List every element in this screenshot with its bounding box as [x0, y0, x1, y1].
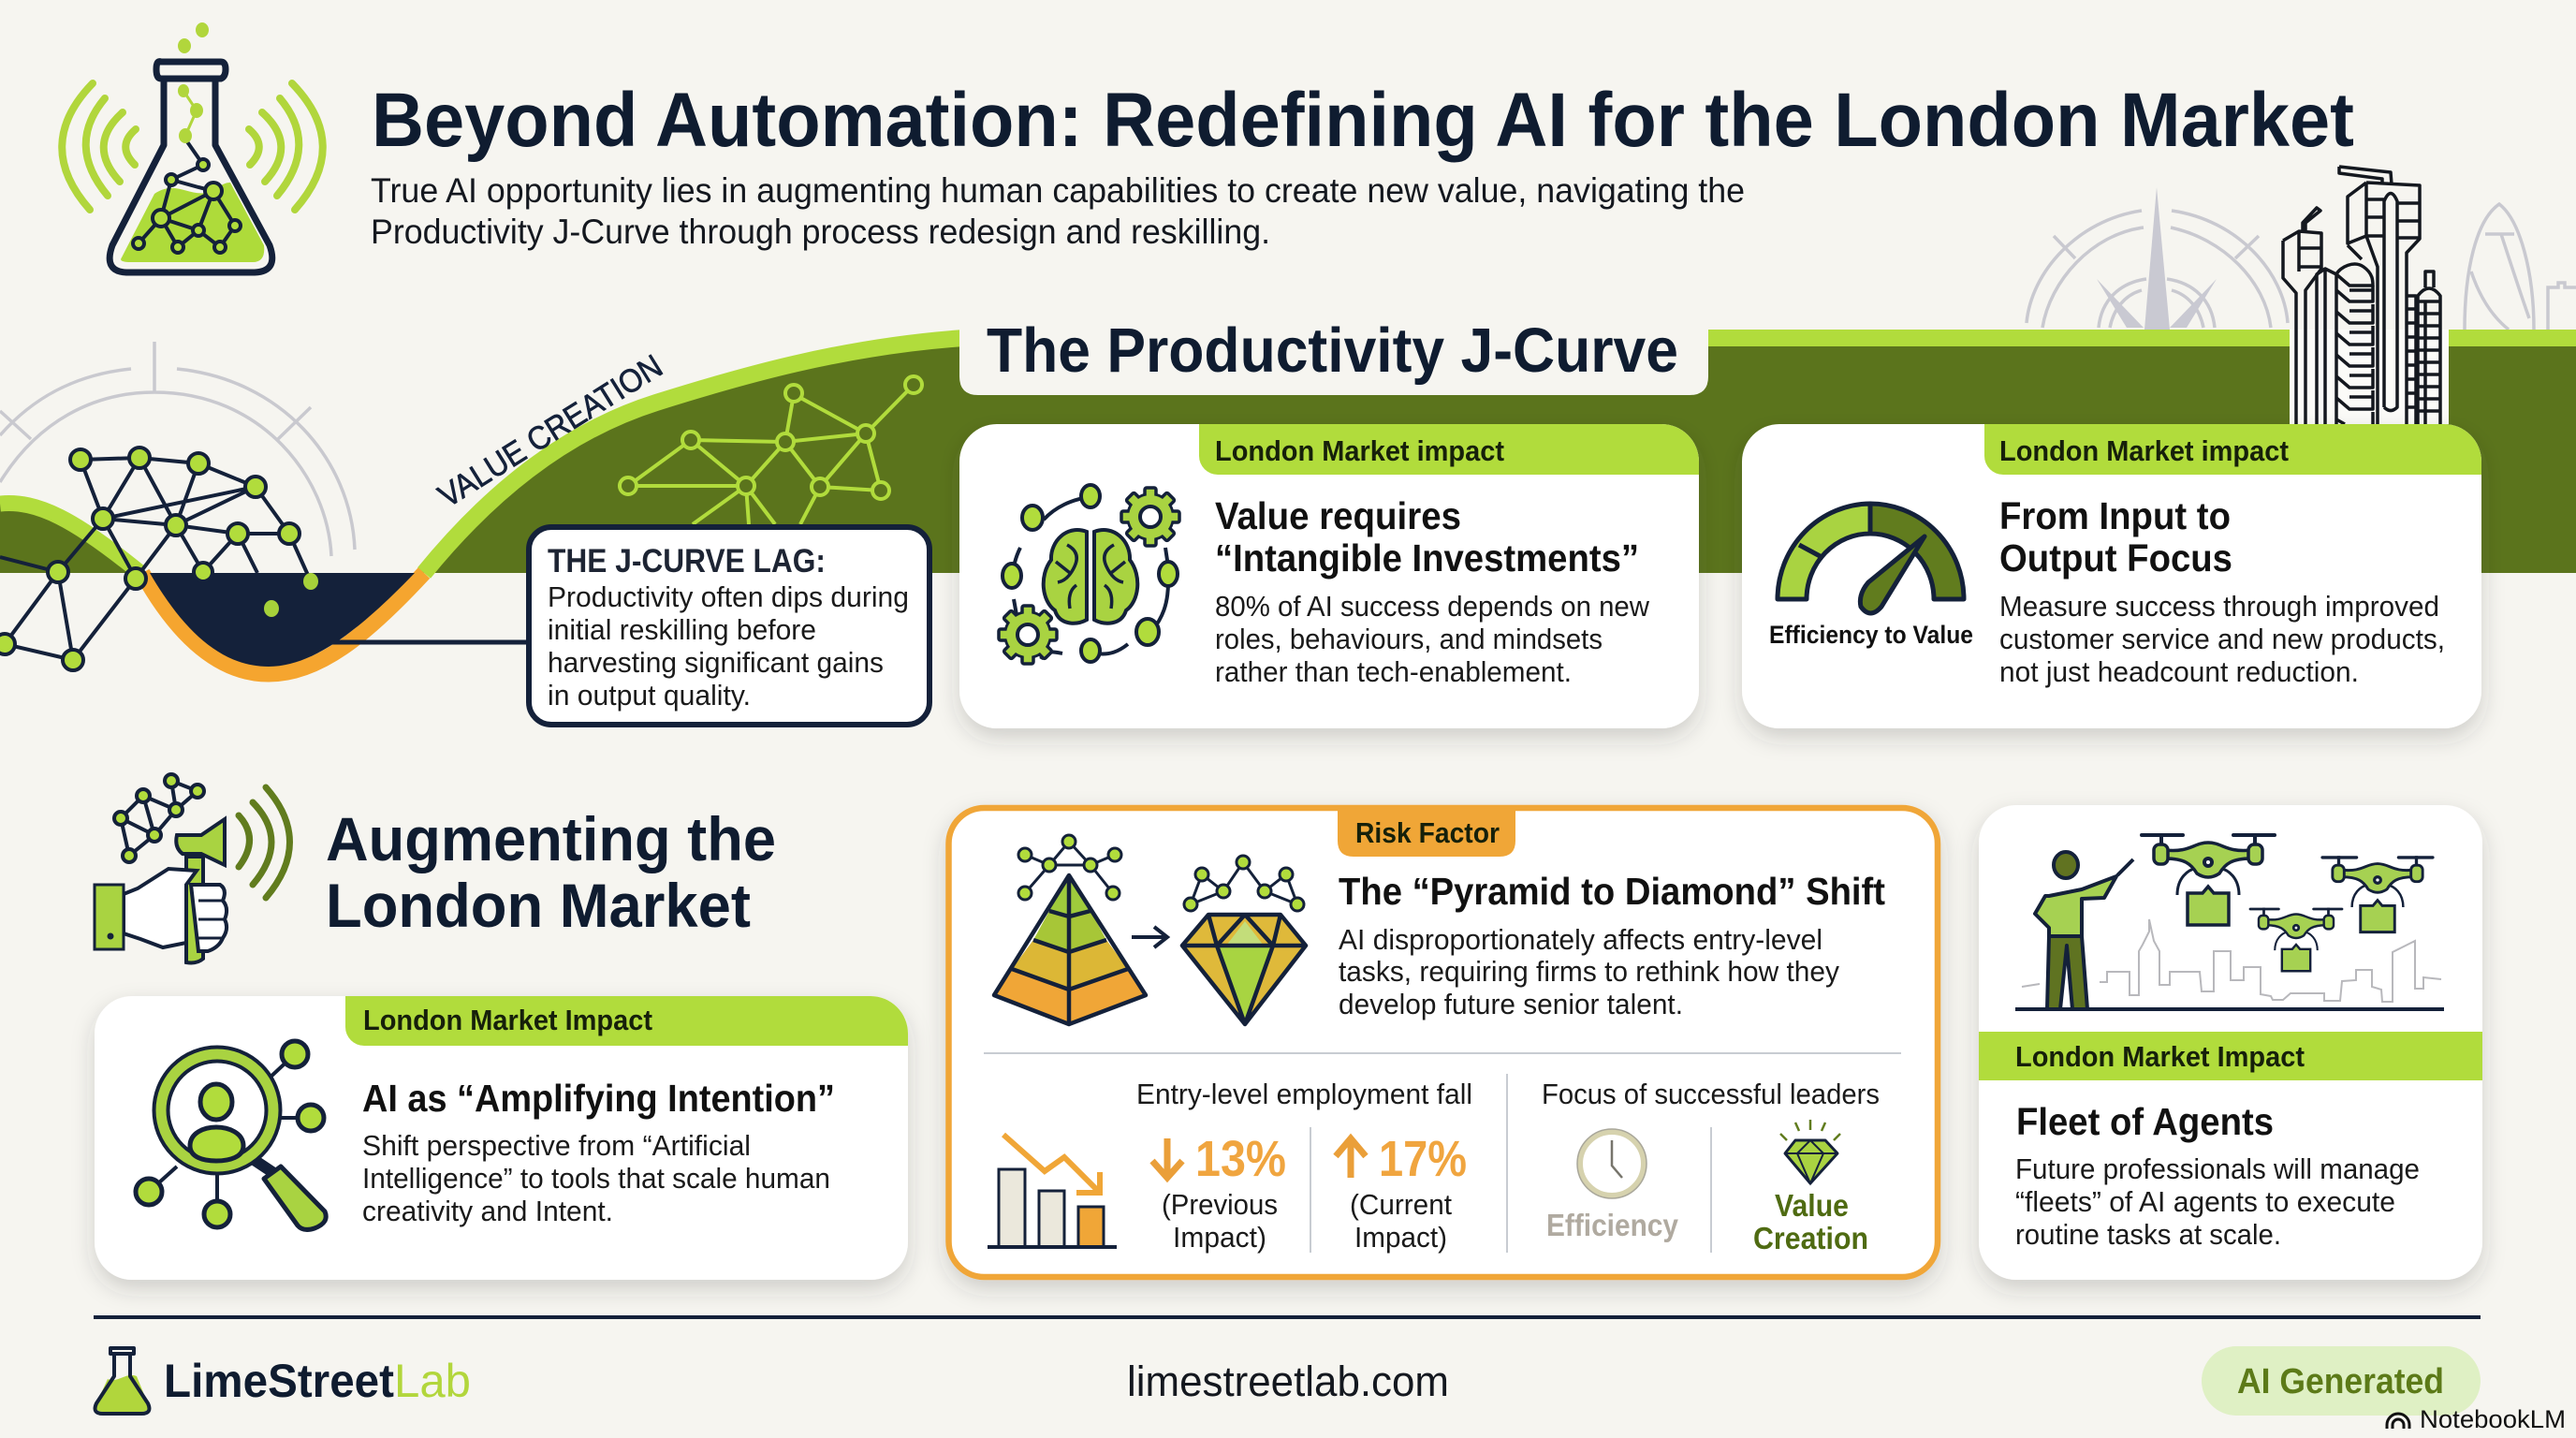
illustration: person directing drones over skyline — [2015, 833, 2444, 1011]
label: Efficiency to Value: Efficiency to Value — [1769, 621, 1973, 649]
tag: Risk Factor — [1338, 808, 1515, 857]
decoration: left grey arcs — [0, 342, 355, 556]
icon: drone 2 — [2320, 856, 2435, 932]
icon: drone 3 — [2249, 908, 2343, 971]
footer: website: limestreetlab.com — [1127, 1357, 1449, 1405]
label: value creation: VALUE CREATION — [432, 348, 669, 515]
stat: entry-level employment fall: Impact) — [1173, 1221, 1266, 1254]
stat: entry-level employment fall: (Previous — [1162, 1188, 1278, 1221]
header: London Market impact: London Market impact — [1215, 434, 1504, 467]
icon: Lloyd's building — [2283, 167, 2449, 424]
icon: magnifier with person and nodes — [136, 1041, 326, 1229]
heading: Augmenting the London Market — [326, 804, 776, 940]
text: card heading and body: customer service and new products, — [1999, 623, 2445, 655]
stat: entry-level employment fall: 17% — [1379, 1131, 1467, 1187]
text: card heading and body: Output Focus — [1999, 536, 2232, 580]
text: card heading and body: “Intangible Investments” — [1215, 536, 1639, 580]
text: card heading and body: 80% of AI success depends on new — [1215, 590, 1650, 623]
icon: efficiency gauge — [1778, 504, 1964, 613]
decoration: gherkin and castle — [2465, 204, 2576, 330]
stat: entry-level employment fall: (Current — [1350, 1188, 1452, 1221]
text: card heading and body: not just headcount reduction. — [1999, 655, 2359, 688]
header: London Market Impact — [345, 996, 908, 1046]
header: London Market impact — [1984, 424, 2481, 475]
callout: J-curve lag: Productivity often dips during — [548, 580, 909, 613]
icon: flask with network and signal waves — [62, 22, 323, 272]
badge: AI Generated — [2202, 1346, 2481, 1416]
icon: value diamond — [1780, 1120, 1840, 1183]
header: London Market Impact: London Market Impact — [363, 1004, 652, 1036]
text: card heading and body — [362, 1077, 835, 1227]
text: card heading and body: From Input to — [1999, 494, 2231, 537]
watermark: NotebookLM: NotebookLM — [2420, 1405, 2566, 1433]
heading: Augmenting the London Market: London Market — [326, 871, 751, 940]
stat: focus of successful leaders: Focus of successful leaders — [1542, 1078, 1880, 1110]
decoration: compass skyline — [2027, 187, 2288, 330]
icon: pyramid to diamond — [994, 835, 1306, 1024]
stat: entry-level employment fall: Impact) — [1354, 1221, 1447, 1254]
callout: J-curve lag: in output quality. — [548, 679, 751, 712]
stat: focus of successful leaders: Creation — [1753, 1221, 1868, 1255]
heading tab: The Productivity J-Curve: The Productivity J-Curve — [987, 315, 1678, 386]
heading: Augmenting the London Market: Augmenting the — [326, 804, 776, 873]
text: card heading and body — [1999, 494, 2445, 688]
footer: logo — [95, 1348, 471, 1414]
panel: AI as amplifying intention — [95, 996, 908, 1280]
stat: focus of successful leaders — [1542, 1078, 1880, 1255]
text: card heading and body — [2015, 1100, 2420, 1251]
text: card heading and body: Measure success through improved — [1999, 590, 2439, 623]
text: card heading and body: Value requires — [1215, 494, 1461, 537]
tag: Risk Factor: Risk Factor — [1355, 816, 1500, 849]
text: card heading and body: roles, behaviours, and mindsets — [1215, 623, 1603, 655]
icon: drone 1 — [2140, 833, 2276, 925]
header: London Market Impact — [1979, 1032, 2482, 1080]
icon: network over curve — [0, 448, 318, 670]
panel: from input to output focus — [1742, 424, 2481, 728]
subtitle: Productivity J-Curve through process redesign and reskilling. — [371, 213, 1270, 251]
text: card heading and body: routine tasks at scale. — [2015, 1218, 2281, 1251]
subtitle: True AI opportunity lies in augmenting human capabilities to create new value, navigating the — [371, 171, 1745, 210]
stat: entry-level employment fall — [1136, 1078, 1472, 1254]
stat: focus of successful leaders: Value — [1775, 1188, 1849, 1223]
stat: entry-level employment fall: Entry-level employment fall — [1136, 1078, 1472, 1110]
text: shift heading and body: develop future senior talent. — [1339, 988, 1683, 1020]
text: card heading and body — [1215, 494, 1650, 688]
text: card heading and body: AI as “Amplifying Intention” — [362, 1077, 835, 1120]
icon: brain with gears — [999, 485, 1179, 664]
stat: focus of successful leaders: Efficiency — [1546, 1208, 1679, 1242]
text: shift heading and body: tasks, requiring firms to rethink how they — [1339, 955, 1839, 988]
text: card heading and body: creativity and Intent. — [362, 1195, 613, 1227]
header: London Market impact: London Market impact — [1999, 434, 2289, 467]
subtitle — [371, 171, 1745, 251]
text: shift heading and body — [1339, 870, 1885, 1020]
chart: falling bars — [988, 1135, 1117, 1247]
panel: risk factor pyramid to diamond — [949, 808, 1938, 1277]
panel: value requires intangible investments — [959, 424, 1699, 728]
title: Beyond Automation: Redefining AI for the London Market — [372, 78, 2354, 163]
callout: J-curve lag: initial reskilling before — [548, 613, 816, 646]
text: card heading and body: Fleet of Agents — [2016, 1100, 2274, 1143]
callout: J-curve lag: THE J-CURVE LAG: — [548, 543, 826, 580]
icon: lime network inside band — [620, 376, 922, 524]
text: shift heading and body: The “Pyramid to Diamond” Shift — [1339, 870, 1885, 913]
callout: J-curve lag: harvesting significant gains — [548, 646, 884, 679]
text: card heading and body: Shift perspective from “Artificial — [362, 1129, 751, 1162]
header: London Market Impact: London Market Impact — [2015, 1040, 2305, 1073]
panel: fleet of agents — [1979, 805, 2482, 1280]
text: card heading and body: rather than tech-enablement. — [1215, 655, 1572, 688]
text: card heading and body: “fleets” of AI agents to execute — [2015, 1185, 2395, 1218]
header: London Market impact — [1199, 424, 1699, 475]
icon: clock — [1577, 1129, 1647, 1198]
badge: AI Generated: AI Generated — [2237, 1362, 2444, 1401]
chart: J-curve band — [0, 330, 2576, 674]
text: card heading and body: Intelligence” to tools that scale human — [362, 1162, 830, 1195]
stat: entry-level employment fall: 13% — [1195, 1131, 1286, 1187]
callout: J-curve lag — [529, 527, 929, 725]
footer: logo: Lab — [394, 1355, 471, 1407]
text: card heading and body: Future professionals will manage — [2015, 1152, 2420, 1185]
footer: logo: LimeStreet — [164, 1355, 394, 1407]
icon: hand with megaphone and network — [95, 774, 290, 962]
text: shift heading and body: AI disproportionately affects entry-level — [1339, 923, 1822, 956]
